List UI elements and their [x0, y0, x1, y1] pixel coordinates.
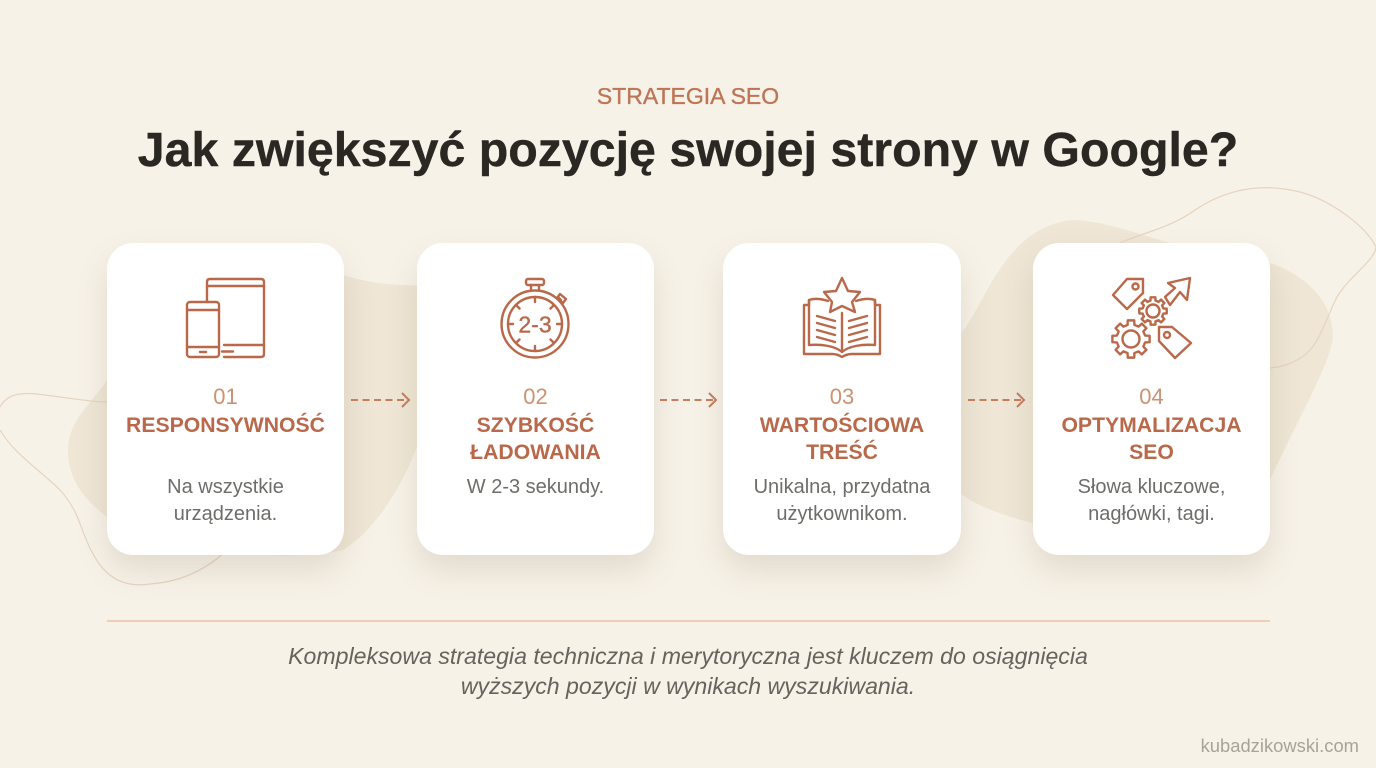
arrow 3: [968, 392, 1026, 408]
description: Unikalna, przydatna: [754, 476, 930, 498]
heading: [1061, 414, 1242, 464]
line: left squiggle: [0, 393, 225, 585]
heading: SEO: [1129, 441, 1174, 464]
icon: seo tags gears arrow: [1111, 276, 1192, 360]
icon: devices: [186, 278, 266, 358]
heading: SZYBKOŚĆ: [477, 414, 594, 437]
title: Jak zwiększyć pozycję swojej strony w Google?: [138, 123, 1238, 177]
heading: TREŚĆ: [806, 441, 878, 464]
card 1: [107, 243, 344, 555]
eyebrow: STRATEGIA SEO: [597, 83, 779, 109]
card 4: [1033, 243, 1270, 555]
divider: [107, 620, 1270, 622]
number: 02: [523, 384, 548, 409]
line: right squiggle: [1120, 188, 1376, 368]
number: 03: [830, 384, 854, 409]
number: 01: [213, 384, 238, 409]
heading: [470, 412, 601, 464]
footer statement: wyższych pozycji w wynikach wyszukiwania.: [461, 673, 915, 699]
icon: stopwatch: [500, 278, 570, 359]
footer statement: Kompleksowa strategia techniczna i merytoryczna jest kluczem do osiągnięcia: [288, 643, 1088, 669]
description: nagłówki, tagi.: [1088, 502, 1215, 524]
footer statement: [288, 643, 1088, 699]
icon: book with star: [802, 276, 882, 358]
description: urządzenia.: [174, 502, 277, 524]
arrow 1: [351, 392, 410, 408]
blob: left: [68, 274, 443, 555]
description: [754, 476, 930, 524]
heading: ŁADOWANIA: [470, 441, 601, 464]
blob: right: [938, 220, 1333, 533]
description: W 2-3 sekundy.: [467, 476, 604, 498]
heading: RESPONSYWNOŚĆ: [126, 414, 325, 437]
card 2: [417, 243, 654, 555]
number: 04: [1139, 384, 1164, 409]
heading: WARTOŚCIOWA: [760, 414, 924, 437]
description: [167, 476, 284, 524]
heading: [760, 412, 924, 464]
card 3: [723, 243, 961, 555]
heading: OPTYMALIZACJA: [1061, 414, 1242, 437]
description: użytkownikom.: [776, 502, 908, 524]
watermark: kubadzikowski.com: [1201, 735, 1359, 756]
description: [1078, 476, 1225, 524]
description: Słowa kluczowe,: [1078, 476, 1225, 498]
icon: stopwatch: 2-3: [518, 312, 552, 338]
description: Na wszystkie: [167, 476, 284, 498]
arrow 2: [660, 392, 718, 408]
